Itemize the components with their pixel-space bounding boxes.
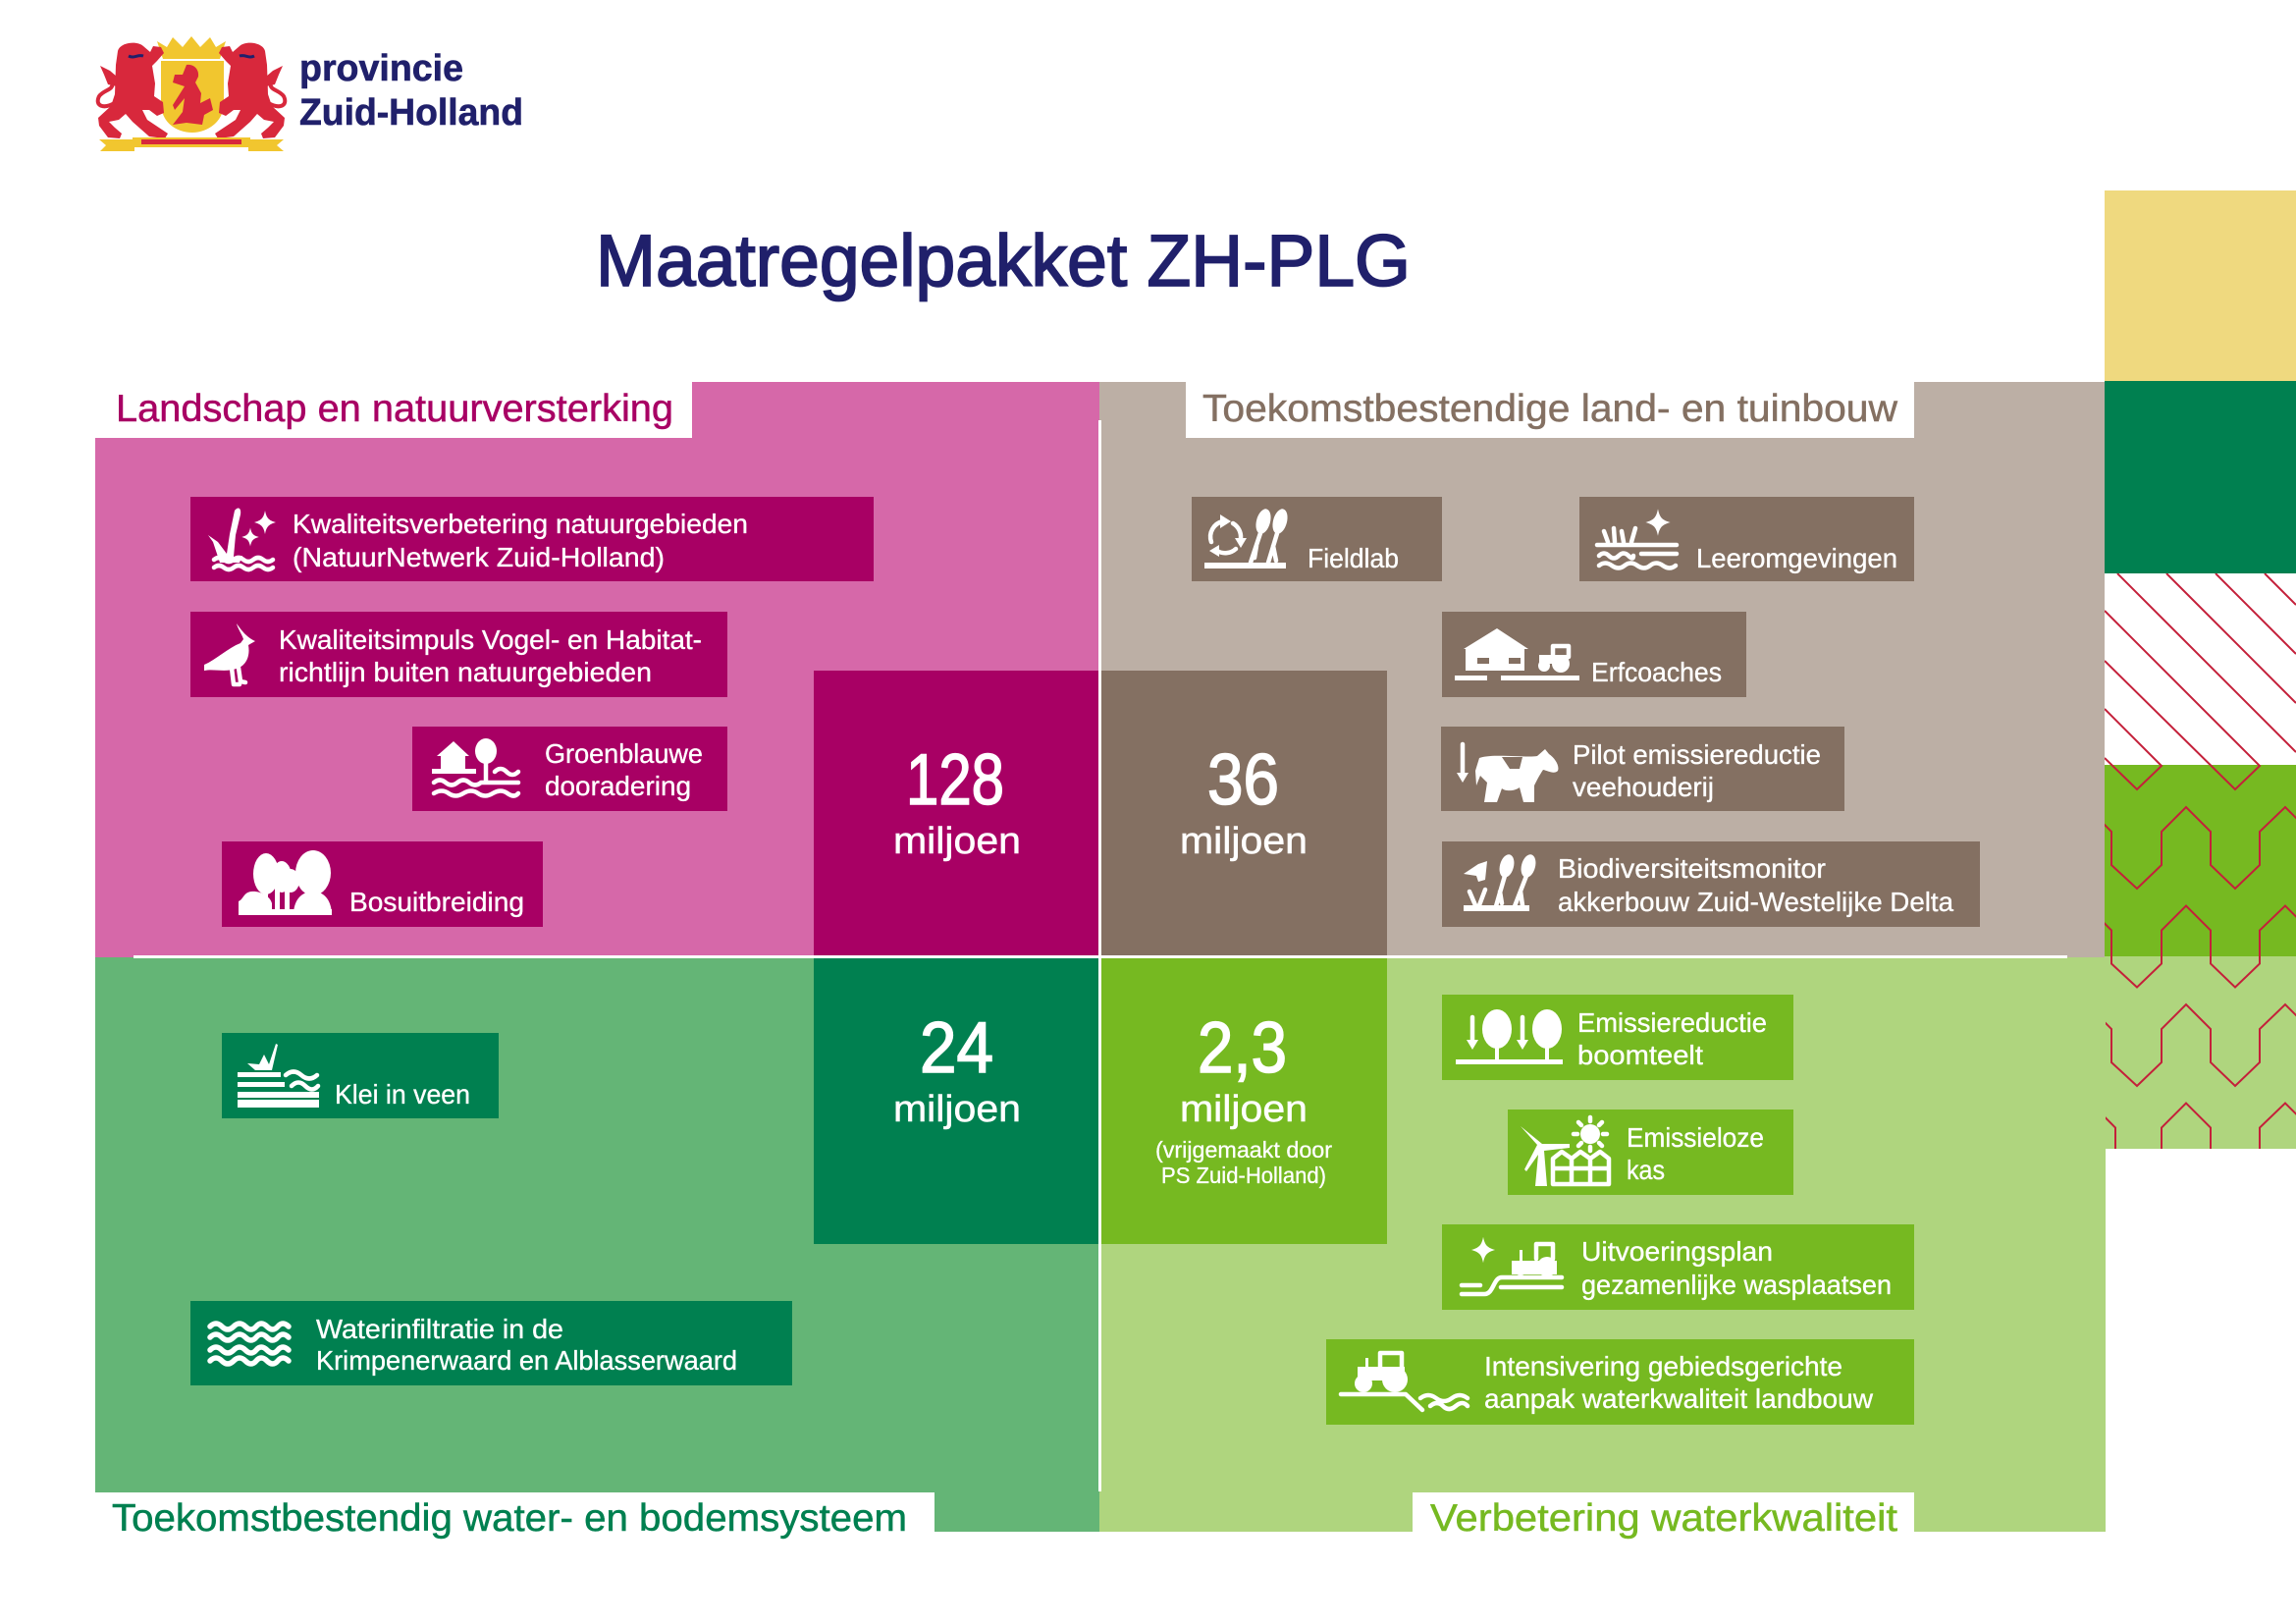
panel: Landschap en natuurversterking <box>95 382 1099 957</box>
icon: forest <box>239 850 332 915</box>
item: Biodiversiteitsmonitor: Biodiversiteitsmonitor <box>1558 853 1826 884</box>
budget: 24 miljoen: 24 <box>920 1008 993 1088</box>
item: Waterinfiltratie: Krimpenerwaard en Alblasserwaard <box>316 1345 737 1376</box>
budget: 128 miljoen: 128 <box>906 740 1004 820</box>
budget: 128 miljoen: miljoen <box>893 821 1021 862</box>
heading: Landschap en natuurversterking: Landschap en natuurversterking <box>116 388 673 430</box>
item: Kwaliteitsimpuls Vogel- en Habitatrichtlijn: richtlijn buiten natuurgebieden <box>279 657 652 687</box>
icon: trees and arrows <box>1456 1009 1563 1064</box>
item: Uitvoeringsplan gezamenlijke wasplaatsen <box>1442 1224 1914 1310</box>
item: Pilot emissiereductie veehouderij: veehouderij <box>1573 772 1714 802</box>
item: Groenblauwe dooradering: dooradering <box>545 771 691 801</box>
item: Bosuitbreiding: Bosuitbreiding <box>349 887 524 917</box>
item: Pilot emissiereductie veehouderij: Pilot emissiereductie <box>1573 739 1821 770</box>
panel: Toekomstbestendige land- en tuinbouw <box>1099 382 2105 957</box>
heading: Verbetering waterkwaliteit: Verbetering waterkwaliteit <box>1430 1497 1897 1540</box>
heading: Toekomstbestendige land- en tuinbouw: Toekomstbestendige land- en tuinbouw <box>1202 388 1898 430</box>
wordmark: Zuid-Holland <box>299 92 523 134</box>
item: Kwaliteitsverbetering natuurgebieden: Kwaliteitsverbetering natuurgebieden <box>293 509 748 539</box>
budget: 2,3 miljoen: 2,3 <box>1198 1008 1287 1088</box>
item: Fieldlab <box>1192 497 1442 581</box>
item: Emissiereductie boomteelt <box>1442 995 1793 1080</box>
budget: 2,3 miljoen: miljoen <box>1180 1089 1308 1130</box>
wordmark <box>299 48 523 134</box>
budget: 2,3 miljoen: PS Zuid-Holland) <box>1161 1163 1326 1188</box>
item: Biodiversiteitsmonitor: akkerbouw Zuid-Westelijke Delta <box>1558 887 1953 917</box>
heading: Toekomstbestendig water- en bodemsysteem: Toekomstbestendig water- en bodemsysteem <box>112 1497 907 1540</box>
item: Emissiereductie boomteelt: boomteelt <box>1577 1040 1703 1070</box>
icon: clay layers and reed <box>238 1044 319 1108</box>
icon: lapwing bird <box>204 623 255 684</box>
budget: 24 miljoen <box>814 958 1099 1244</box>
budget: 36 miljoen: miljoen <box>1180 821 1308 862</box>
item: Kwaliteitsverbetering natuurgebieden: (NatuurNetwerk Zuid-Holland) <box>293 542 665 572</box>
item: Waterinfiltratie: Waterinfiltratie in de <box>316 1314 563 1344</box>
item: Groenblauwe dooradering: Groenblauwe <box>545 738 703 769</box>
item: Erfcoaches: Erfcoaches <box>1591 657 1722 687</box>
item: Emissieloze kas <box>1508 1110 1793 1195</box>
budget: 36 miljoen: 36 <box>1207 740 1279 820</box>
item: Uitvoeringsplan gezamenlijke wasplaatsen: Uitvoeringsplan <box>1581 1236 1773 1267</box>
item: Leeromgevingen <box>1579 497 1914 581</box>
item: Klei in veen: Klei in veen <box>335 1079 470 1110</box>
item: Bosuitbreiding <box>222 841 543 927</box>
crest: coat of arms <box>98 36 285 151</box>
icon: reed and sparkles <box>208 508 276 569</box>
item: Kwaliteitsimpuls Vogel- en Habitatrichtlijn: Kwaliteitsimpuls Vogel- en Habitat- <box>279 624 702 655</box>
item: Kwaliteitsimpuls Vogel- en Habitatrichtlijn <box>190 612 727 697</box>
icon: recycling wheat <box>1204 508 1290 568</box>
icon: arrow and cow <box>1457 744 1558 802</box>
item: Waterinfiltratie <box>190 1301 792 1385</box>
item: Klei in veen <box>222 1033 499 1118</box>
item: Biodiversiteitsmonitor <box>1442 841 1980 927</box>
item: Leeromgevingen: Leeromgevingen <box>1696 543 1897 573</box>
budget: 24 miljoen: miljoen <box>893 1089 1021 1130</box>
wordmark: provincie <box>299 48 463 89</box>
logo: provincie Zuid-Holland <box>98 36 523 151</box>
colour stripes with red pattern <box>2105 190 2296 1149</box>
panel: Verbetering waterkwaliteit <box>1099 957 2106 1540</box>
budget: 2,3 miljoen <box>1101 958 1387 1244</box>
icon: house, tree and water <box>432 738 518 795</box>
item: Intensivering gebiedsgerichte aanpak <box>1326 1339 1914 1425</box>
item: Emissieloze kas: kas <box>1627 1155 1665 1185</box>
icon: grass, sparkle and water <box>1597 509 1677 568</box>
icon: water waves <box>210 1324 289 1364</box>
item: Erfcoaches <box>1442 612 1746 697</box>
budget: 2,3 miljoen: (vrijgemaakt door <box>1155 1137 1332 1163</box>
item: Emissieloze kas: Emissieloze <box>1627 1122 1764 1153</box>
icon: tractor, slope and water <box>1341 1353 1468 1410</box>
item: Pilot emissiereductie veehouderij <box>1441 727 1844 811</box>
icon: wind turbine, sun and greenhouse <box>1521 1117 1609 1186</box>
icon: sparkle, tractor and washing place <box>1462 1237 1562 1294</box>
item: Intensivering gebiedsgerichte aanpak: Intensivering gebiedsgerichte <box>1484 1351 1842 1381</box>
item: Groenblauwe dooradering <box>412 727 727 811</box>
icon: farm and tractor <box>1455 628 1579 680</box>
item: Intensivering gebiedsgerichte aanpak: aanpak waterkwaliteit landbouw <box>1484 1383 1874 1414</box>
icon: butterfly and wheat <box>1464 853 1538 911</box>
item: Fieldlab: Fieldlab <box>1308 543 1399 573</box>
title: Maatregelpakket ZH-PLG <box>596 220 1411 301</box>
item: Uitvoeringsplan gezamenlijke wasplaatsen: gezamenlijke wasplaatsen <box>1581 1270 1892 1300</box>
item: Kwaliteitsverbetering natuurgebieden <box>190 497 874 581</box>
item: Emissiereductie boomteelt: Emissiereductie <box>1577 1007 1767 1038</box>
budget: 128 miljoen <box>814 671 1099 957</box>
panel: Toekomstbestendig water- en bodemsysteem <box>95 957 1099 1540</box>
budget: 36 miljoen <box>1101 671 1387 957</box>
